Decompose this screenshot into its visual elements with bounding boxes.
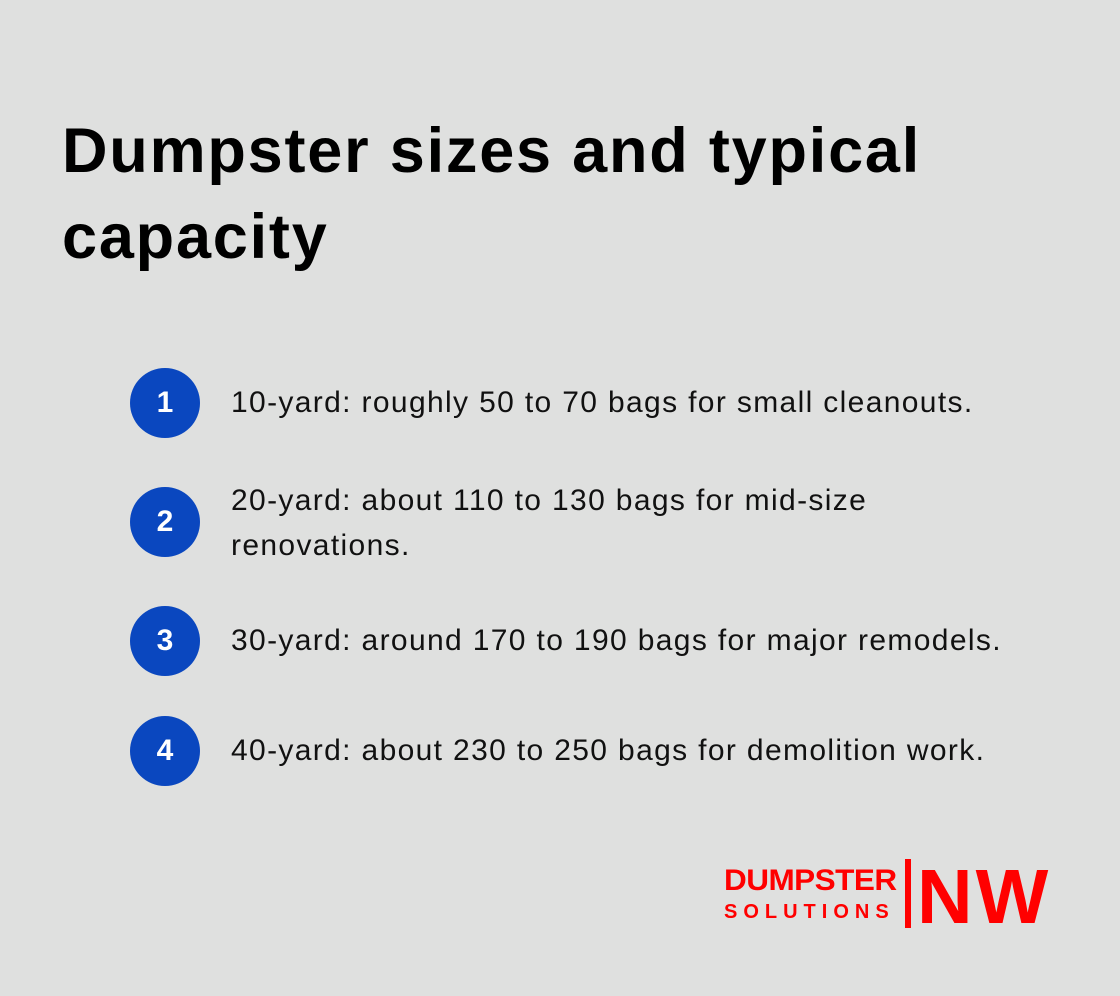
text 3: 30-yard: around 170 to 190 bags for major remodels. (231, 624, 1002, 657)
badge 4: 4 (157, 734, 173, 767)
item 1 (130, 368, 974, 438)
text 2: 20-yard: about 110 to 130 bags for mid-size (231, 484, 867, 517)
logo: DUMPSTER (724, 864, 897, 897)
badge 3 (130, 606, 200, 676)
text 2 (231, 484, 867, 562)
item 4 (130, 716, 985, 786)
text 4: 40-yard: about 230 to 250 bags for demolition work. (231, 734, 985, 767)
title: capacity (62, 202, 329, 272)
badge 1: 1 (157, 386, 173, 419)
title: Dumpster sizes and typical (62, 116, 921, 186)
badge 4 (130, 716, 200, 786)
text 2: renovations. (231, 529, 411, 562)
logo: NW (917, 854, 1051, 940)
logo: SOLUTIONS (724, 901, 895, 923)
title (62, 116, 921, 272)
badge 3: 3 (157, 624, 173, 657)
item 3 (130, 606, 1002, 676)
logo (724, 854, 1051, 940)
badge 1 (130, 368, 200, 438)
text 1: 10-yard: roughly 50 to 70 bags for small cleanouts. (231, 386, 974, 419)
item 2 (130, 484, 867, 562)
badge 2 (130, 487, 200, 557)
badge 2: 2 (157, 505, 173, 538)
